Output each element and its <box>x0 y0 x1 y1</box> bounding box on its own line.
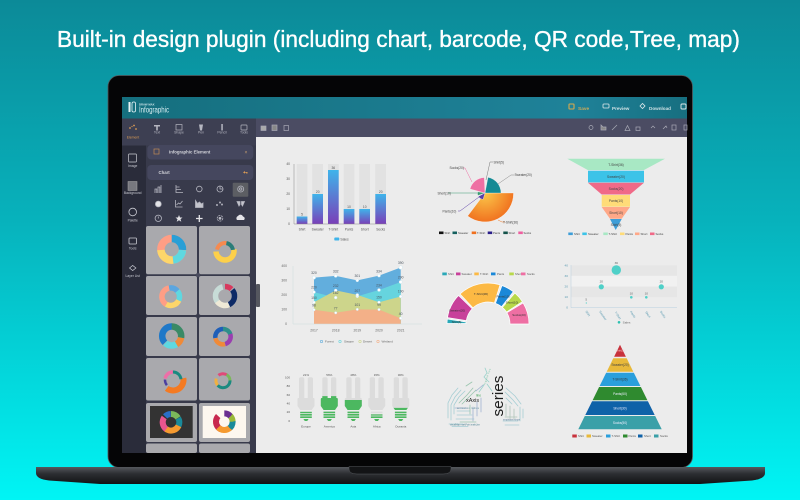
x axis labels: Pants <box>629 310 637 319</box>
x axis labels: Short <box>361 228 369 232</box>
value labels: 98 <box>312 304 316 308</box>
value labels: 390 <box>398 261 404 265</box>
logo: Infographic <box>139 106 169 114</box>
x axis labels: 2019 <box>354 328 361 332</box>
bulb: Africa: Africa <box>373 424 381 428</box>
legend <box>442 272 535 276</box>
donut thumbnails <box>158 237 238 434</box>
save button <box>569 104 590 112</box>
chart: nightingale pie: T-Shirt(36) <box>503 220 518 224</box>
value labels: 301 <box>354 274 360 278</box>
bulb: Asia: 48% <box>350 373 357 377</box>
x axis labels: Socks <box>376 228 386 232</box>
chart: nightingale pie: Sweater(20) <box>514 173 532 177</box>
value labels: 220 <box>311 286 317 290</box>
legend: Forest <box>325 340 334 344</box>
layer labels: Sweater(20) <box>611 363 629 367</box>
y axis labels <box>281 264 287 326</box>
funnel labels <box>607 163 625 227</box>
small words: emphasis show <box>503 418 520 422</box>
chart: semi-donut gauge <box>442 272 535 324</box>
gauge labels <box>449 292 526 324</box>
chart: bubble <box>565 261 677 324</box>
areas <box>314 268 401 324</box>
preview button: Preview <box>612 106 630 111</box>
small words <box>450 368 520 426</box>
x axis labels <box>310 328 405 332</box>
chart: nightingale pie: Short(10) <box>438 192 451 196</box>
bulb: Asia: Asia <box>350 424 357 428</box>
funnel labels: T-Shirt(36) <box>608 163 624 167</box>
panel collapse handle <box>256 284 260 307</box>
y axis labels: 20 <box>286 192 290 196</box>
y axis labels: 40 <box>565 264 568 268</box>
bulb: Oceania: 30% <box>398 373 404 377</box>
values: 36 <box>331 166 335 170</box>
download button <box>640 104 671 111</box>
canvas <box>256 137 687 453</box>
chart: nightingale pie: Socks(20) <box>450 166 464 170</box>
print icon <box>681 104 686 109</box>
y axis labels: 0 <box>285 322 287 326</box>
legend: Sales <box>340 237 349 241</box>
legend <box>568 232 664 236</box>
legend: Pants <box>626 232 633 236</box>
gauge labels: Short(10) <box>506 300 518 304</box>
shape tool: Shape <box>174 130 184 134</box>
background item: Background <box>124 191 142 195</box>
legend: Shirt <box>444 231 450 235</box>
legend: Socks <box>527 272 535 276</box>
chart type icons <box>155 185 245 222</box>
values <box>301 166 383 216</box>
bulb axis labels <box>285 376 290 423</box>
value labels: 334 <box>376 270 382 274</box>
axes <box>294 164 387 224</box>
legend <box>439 231 532 235</box>
tools item <box>129 238 137 250</box>
legend: Socks <box>656 232 664 236</box>
y axis labels: 10 <box>286 207 290 211</box>
bubble values: 20 <box>600 280 603 284</box>
laptop base <box>36 467 765 484</box>
bulb: Africa: 15% <box>374 373 380 377</box>
axes <box>293 266 422 324</box>
legend: T-Shirt <box>477 231 485 235</box>
x axis labels: Shirt <box>584 310 591 317</box>
bubble values: 20 <box>660 280 663 284</box>
value labels: 207 <box>354 289 360 293</box>
values: 20 <box>316 190 320 194</box>
y axis labels: 0 <box>566 306 568 310</box>
x axis labels: Sweater <box>598 310 608 321</box>
lung word strokes <box>448 368 523 426</box>
funnel labels: Shirt(5) <box>611 223 621 227</box>
small words: visualMap markPoint markLine <box>450 424 481 426</box>
bubble values: 36 <box>615 261 618 265</box>
chart: nightingale pie: Shirt(5) <box>494 160 504 164</box>
x axis labels: T-Shirt <box>614 311 622 320</box>
legend: Shirt <box>578 434 584 438</box>
large words <box>466 376 507 416</box>
thumbnail light background <box>203 406 246 438</box>
legend: Sweater <box>462 272 472 276</box>
large words: series <box>491 376 507 416</box>
funnel labels: Short(10) <box>609 211 623 215</box>
value labels: 332 <box>333 270 339 274</box>
bulb axis labels: 80 <box>287 384 290 388</box>
values: 10 <box>347 205 351 209</box>
layer labels: Shirt(5) <box>615 348 625 352</box>
x axis labels: Shirt <box>299 228 305 232</box>
value labels: 234 <box>376 284 382 288</box>
funnel segments <box>567 159 665 170</box>
sectors <box>468 177 514 222</box>
tools tool: Tools <box>240 130 248 134</box>
save button: Save <box>578 106 590 112</box>
laptop notch <box>349 466 451 474</box>
gauge labels: Sweater(20) <box>449 308 465 312</box>
title: Built-in design plugin (including chart, barcode, QR code,Tree, map) <box>57 26 740 52</box>
x axis labels: 2020 <box>375 328 383 332</box>
bulb axis labels: 20 <box>287 410 290 414</box>
values: 10 <box>363 205 367 209</box>
chart: lung word cloud <box>448 368 523 426</box>
legend <box>572 434 668 438</box>
x axis labels: Socks <box>659 310 667 319</box>
legend: Short <box>508 231 515 235</box>
laptop <box>36 76 765 484</box>
pen tool: Pen <box>198 130 204 134</box>
layer labels <box>611 348 629 425</box>
value labels: 150 <box>311 296 317 300</box>
pyramid layers <box>614 345 626 357</box>
y axis labels: 20 <box>565 284 568 288</box>
value labels: 182 <box>333 291 339 295</box>
legend: Pants <box>497 272 505 276</box>
bulb: Asia <box>345 373 362 428</box>
bubble values: 5 <box>585 298 587 302</box>
y axis labels: 40 <box>286 162 290 166</box>
value labels: 150 <box>376 296 382 300</box>
chart: nightingale pie <box>438 160 532 235</box>
layer list item <box>126 266 140 278</box>
values: 20 <box>379 190 383 194</box>
x axis labels <box>299 228 386 232</box>
canvas toolbar icons <box>261 125 687 130</box>
legend: Short <box>640 232 648 236</box>
logo: DRAW MAX <box>139 102 155 106</box>
panel heading <box>147 145 253 160</box>
small words: legend line <box>483 368 492 385</box>
gauge labels: Shirt(5) <box>452 320 461 324</box>
gauge labels: Socks(20) <box>512 313 526 317</box>
bands <box>571 265 677 297</box>
laptop lid <box>108 76 692 468</box>
x axis labels: T-Shirt <box>328 228 338 232</box>
value labels: 320 <box>311 271 317 275</box>
selected chart type <box>233 183 248 197</box>
legend: T-Shirt <box>480 272 488 276</box>
bulb: America: 56% <box>326 373 333 377</box>
value labels <box>311 261 404 316</box>
chart: bar chart <box>286 162 387 241</box>
y axis labels: 30 <box>565 274 568 278</box>
funnel labels: Sweater(20) <box>607 175 625 179</box>
preview button <box>603 104 630 111</box>
small words: animation radius <box>457 407 480 410</box>
y axis labels: 200 <box>281 293 287 297</box>
legend: Socks <box>660 434 668 438</box>
chart row: Chart <box>158 170 170 175</box>
chart: pyramid <box>572 345 668 438</box>
value labels: 77 <box>334 306 338 310</box>
chart: nightingale pie: Pants(10) <box>442 210 456 214</box>
legend: Sales <box>623 320 631 324</box>
y axis labels: 100 <box>281 308 287 312</box>
layer labels: Socks(50) <box>613 421 627 425</box>
x axis labels: 2021 <box>397 328 405 332</box>
background item <box>124 182 142 195</box>
layer list item: Layer List <box>126 274 140 278</box>
bulb: Europe: 21% <box>303 373 309 377</box>
gauge labels: T-Shirt(36) <box>474 292 488 296</box>
layer labels: Short(30) <box>613 406 627 410</box>
y axis labels: 30 <box>286 177 290 181</box>
left sidebar <box>122 146 146 453</box>
funnel labels: Socks(20) <box>609 187 623 191</box>
legend: Socks <box>524 231 532 235</box>
bar backgrounds <box>297 164 386 224</box>
value labels: 232 <box>333 284 339 288</box>
text tool: Text <box>154 130 160 134</box>
funnel labels: Pants(10) <box>609 199 623 203</box>
bulb: Oceania <box>392 373 409 428</box>
value labels: 40 <box>399 312 403 316</box>
data points <box>312 266 403 320</box>
y axis labels <box>286 162 290 226</box>
legend: Sweater <box>588 232 599 236</box>
bubble values: 10 <box>630 292 633 296</box>
legend: Pants <box>628 434 636 438</box>
legend: Pants <box>493 231 501 235</box>
bulb: America <box>321 373 338 428</box>
bulb axis labels: 60 <box>287 393 290 397</box>
gauge segments <box>447 283 529 324</box>
chart row <box>147 165 253 180</box>
x axis labels: Short <box>644 310 652 319</box>
x axis labels: Sweater <box>312 228 325 232</box>
values: 5 <box>301 212 303 216</box>
chart: light bulbs <box>285 373 409 428</box>
logo <box>128 102 169 114</box>
left toolbar <box>122 118 256 146</box>
bars <box>297 170 386 224</box>
legend: Shirt <box>448 272 454 276</box>
header bar <box>122 97 687 118</box>
legend: T-Shirt <box>608 232 617 236</box>
bulb: America: America <box>324 424 335 428</box>
gauge labels: Pants(10) <box>496 294 510 298</box>
axes <box>571 265 677 308</box>
panel heading: × <box>244 150 248 156</box>
y axis labels <box>565 264 568 310</box>
legend: Short <box>644 434 651 438</box>
palette item <box>128 208 138 222</box>
chart: stacked area <box>281 261 422 344</box>
x axis labels: 2018 <box>332 328 340 332</box>
layer labels: T-Shirt(36) <box>612 378 628 382</box>
thumbnail tiles <box>146 226 250 453</box>
download button: Download <box>649 106 671 111</box>
value labels: 190 <box>398 290 404 294</box>
bulb: Europe: Europe <box>301 424 311 428</box>
palette item: Palette <box>128 218 138 222</box>
tools item: Tools <box>129 246 137 250</box>
bubble values <box>585 261 663 302</box>
bulb axis labels: 0 <box>288 419 290 423</box>
leader lines and labels <box>448 162 514 222</box>
large words: xAxis <box>466 398 479 404</box>
legend: Short <box>515 272 522 276</box>
bulb axis labels: 40 <box>287 402 290 406</box>
bulb: Oceania: Oceania <box>395 424 407 428</box>
x axis labels: 2017 <box>310 328 318 332</box>
value labels: 99 <box>377 303 381 307</box>
legend: T-Shirt <box>612 434 620 438</box>
bubble values: 10 <box>645 292 648 296</box>
image item <box>128 154 137 168</box>
x axis labels <box>584 310 667 321</box>
legend <box>320 340 393 344</box>
bulb: Europe <box>298 373 314 428</box>
panel heading: Infographic Element <box>169 150 211 154</box>
legend: Desert <box>363 340 372 344</box>
element tool: Element <box>127 136 139 140</box>
app window <box>122 97 687 453</box>
y axis labels: 10 <box>565 295 568 299</box>
bulb axis labels: 100 <box>285 376 290 380</box>
legend: Sweater <box>592 434 603 438</box>
value labels: 290 <box>398 276 404 280</box>
y axis labels: 400 <box>281 264 287 268</box>
pencil tool: Pencil <box>217 130 227 134</box>
image item: Image <box>128 164 137 168</box>
element panel <box>146 145 256 453</box>
x axis labels: Pants <box>345 228 354 232</box>
legend: Shirt <box>574 232 580 236</box>
y axis labels: 0 <box>288 222 290 226</box>
small words: line <box>476 394 481 398</box>
chart: funnel <box>567 159 665 236</box>
bulb: Africa <box>368 373 385 428</box>
legend: Steppe <box>344 340 354 344</box>
thumbnail dark background <box>150 406 193 438</box>
layer labels: Pants(60) <box>613 392 627 396</box>
legend: Sweater <box>458 231 468 235</box>
y axis labels: 300 <box>281 278 287 282</box>
bubbles <box>586 265 664 304</box>
top toolbar <box>256 118 687 137</box>
value labels: 101 <box>354 303 360 307</box>
legend: Wetland <box>382 340 393 344</box>
